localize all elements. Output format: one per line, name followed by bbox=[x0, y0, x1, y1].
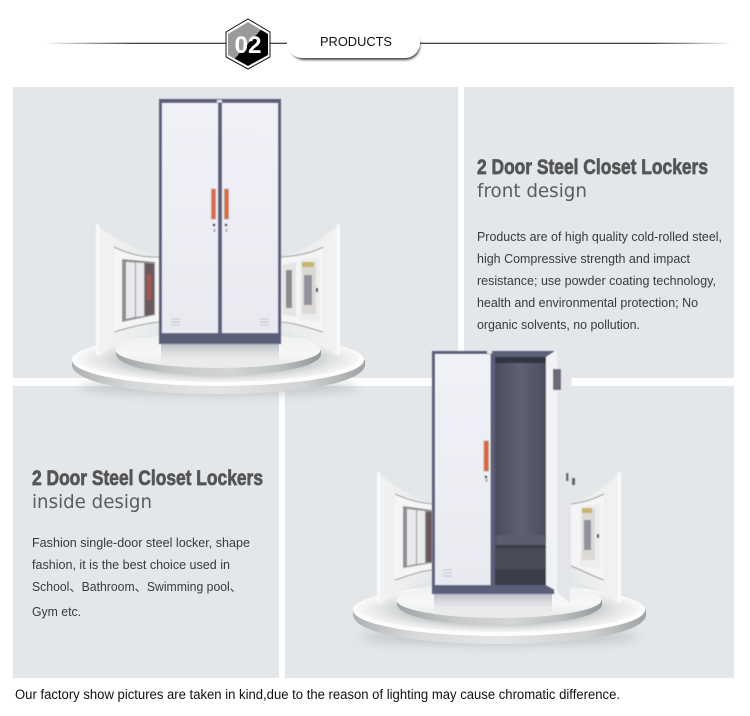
outer platform: open view bbox=[353, 584, 646, 645]
body text: front design: health and environmental protection; No bbox=[477, 296, 698, 310]
subtitle: inside design: inside design bbox=[32, 491, 152, 513]
side panel: right curved wing bbox=[281, 224, 340, 356]
header divider line bbox=[44, 43, 733, 44]
panel: top left background bbox=[13, 87, 458, 378]
title: front design: 2 Door Steel Closet Lockers bbox=[477, 156, 708, 179]
product scene: inside design bbox=[353, 340, 646, 645]
cabinet reflection bbox=[161, 344, 279, 368]
product scene: front design bbox=[72, 99, 365, 395]
heading pill: products bbox=[287, 23, 420, 60]
body text: inside design bbox=[32, 536, 250, 619]
panel: top right background bbox=[464, 87, 734, 378]
subtitle: front design: front design bbox=[477, 180, 587, 202]
panel: bottom right background bbox=[285, 386, 734, 678]
icon: hexagon number badge bbox=[226, 19, 270, 69]
body text: front design: resistance; use powder coating technology, bbox=[477, 274, 716, 288]
text block: front design bbox=[477, 156, 722, 332]
side panel: left curved wing bbox=[377, 472, 432, 604]
body text: front design: Products are of high quality cold-rolled steel, bbox=[477, 230, 722, 244]
body text: front design bbox=[477, 230, 722, 332]
body text: inside design: School、Bathroom、Swimming pool、 bbox=[32, 580, 242, 594]
footer note: Our factory show pictures are taken in kind,due to the reason of lighting may cause chromatic difference. bbox=[15, 687, 620, 702]
body text: inside design: Gym etc. bbox=[32, 605, 81, 619]
heading pill: products: PRODUCTS bbox=[320, 35, 392, 49]
icon: hexagon number badge: 02 bbox=[234, 32, 262, 59]
open door bbox=[546, 340, 572, 603]
title: inside design: 2 Door Steel Closet Lockers bbox=[32, 467, 263, 490]
body text: front design: organic solvents, no pollution. bbox=[477, 318, 640, 332]
side panel: left curved wing bbox=[96, 224, 160, 356]
body text: front design: high Compressive strength and impact bbox=[477, 252, 691, 266]
inner disc: open view bbox=[396, 582, 602, 625]
locker: one door open bbox=[432, 340, 575, 603]
inner disc: front view bbox=[116, 332, 321, 375]
locker: closed double doors bbox=[159, 99, 281, 344]
body text: inside design: fashion, it is the best choice used in bbox=[32, 558, 230, 572]
outer platform: front view bbox=[72, 334, 365, 395]
text block: inside design bbox=[32, 467, 263, 619]
body text: inside design: Fashion single-door steel locker, shape bbox=[32, 536, 250, 550]
cabinet reflection bbox=[434, 594, 552, 618]
panel: bottom left background bbox=[13, 386, 279, 678]
side panel: right curved wing bbox=[571, 472, 621, 604]
